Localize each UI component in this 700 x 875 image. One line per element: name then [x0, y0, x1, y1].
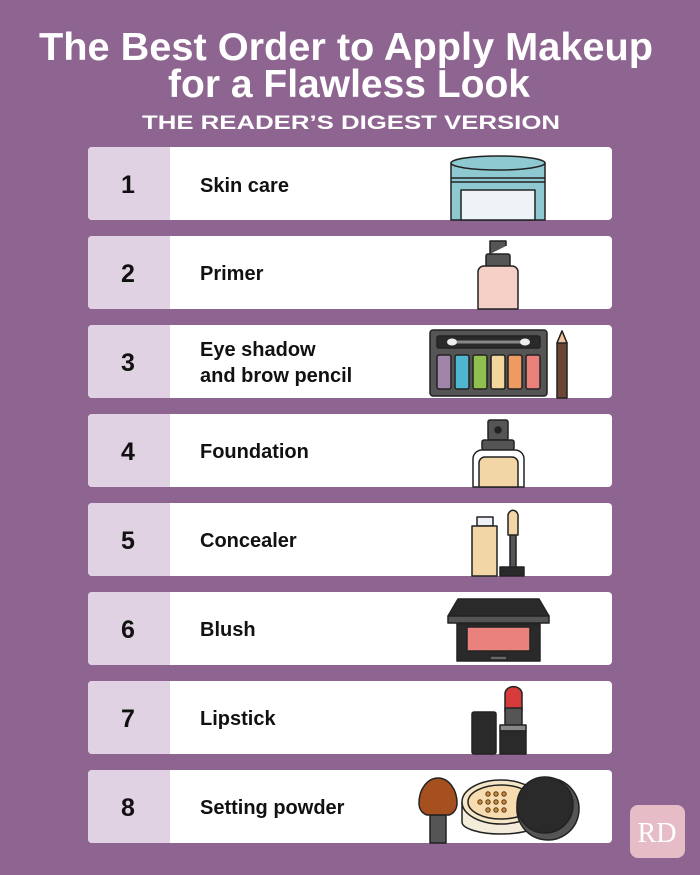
row 3: eye shadow: 3	[121, 349, 135, 377]
title: The Best Order to Apply Makeup	[39, 26, 653, 69]
icon: lipstick	[472, 687, 526, 754]
logo: RD	[630, 805, 685, 858]
icon: eye shadow palette and pencil	[430, 330, 567, 398]
logo: RD: RD	[638, 818, 676, 849]
icon: jar	[451, 156, 545, 220]
row 3: eye shadow	[88, 325, 612, 398]
row 2: primer: 2	[121, 260, 135, 288]
row 1: skin care	[88, 147, 612, 220]
row 5: concealer: 5	[121, 527, 135, 555]
row 6: blush	[88, 592, 612, 665]
row 4: foundation: 4	[121, 438, 135, 466]
row 7: lipstick: 7	[121, 705, 135, 733]
row 2: primer: Primer	[200, 263, 264, 285]
row 1: skin care: 1	[121, 171, 135, 199]
row 8: setting powder	[88, 766, 612, 852]
row 3: eye shadow: and brow pencil	[200, 365, 352, 387]
row 3: eye shadow: Eye shadow	[200, 339, 316, 361]
row 2: primer	[88, 236, 612, 309]
row 5: concealer	[88, 503, 612, 576]
row 4: foundation: Foundation	[200, 441, 309, 463]
icon: foundation bottle	[473, 420, 524, 487]
icon: primer bottle	[478, 241, 518, 309]
row 6: blush: 6	[121, 616, 135, 644]
icon: blush compact	[448, 599, 549, 661]
icon: concealer	[472, 510, 524, 576]
row 1: skin care: Skin care	[200, 175, 289, 197]
row 5: concealer: Concealer	[200, 530, 297, 552]
row 4: foundation	[88, 414, 612, 487]
row 7: lipstick: Lipstick	[200, 708, 276, 730]
title: for a Flawless Look	[168, 63, 530, 106]
row 8: setting powder: Setting powder	[200, 797, 345, 819]
row 6: blush: Blush	[200, 619, 256, 641]
subtitle: THE READER’S DIGEST VERSION	[142, 113, 560, 134]
row 8: setting powder: 8	[121, 794, 135, 822]
title	[39, 26, 653, 106]
icon: brush, powder jar and lid	[419, 766, 591, 852]
row 7: lipstick	[88, 681, 612, 754]
